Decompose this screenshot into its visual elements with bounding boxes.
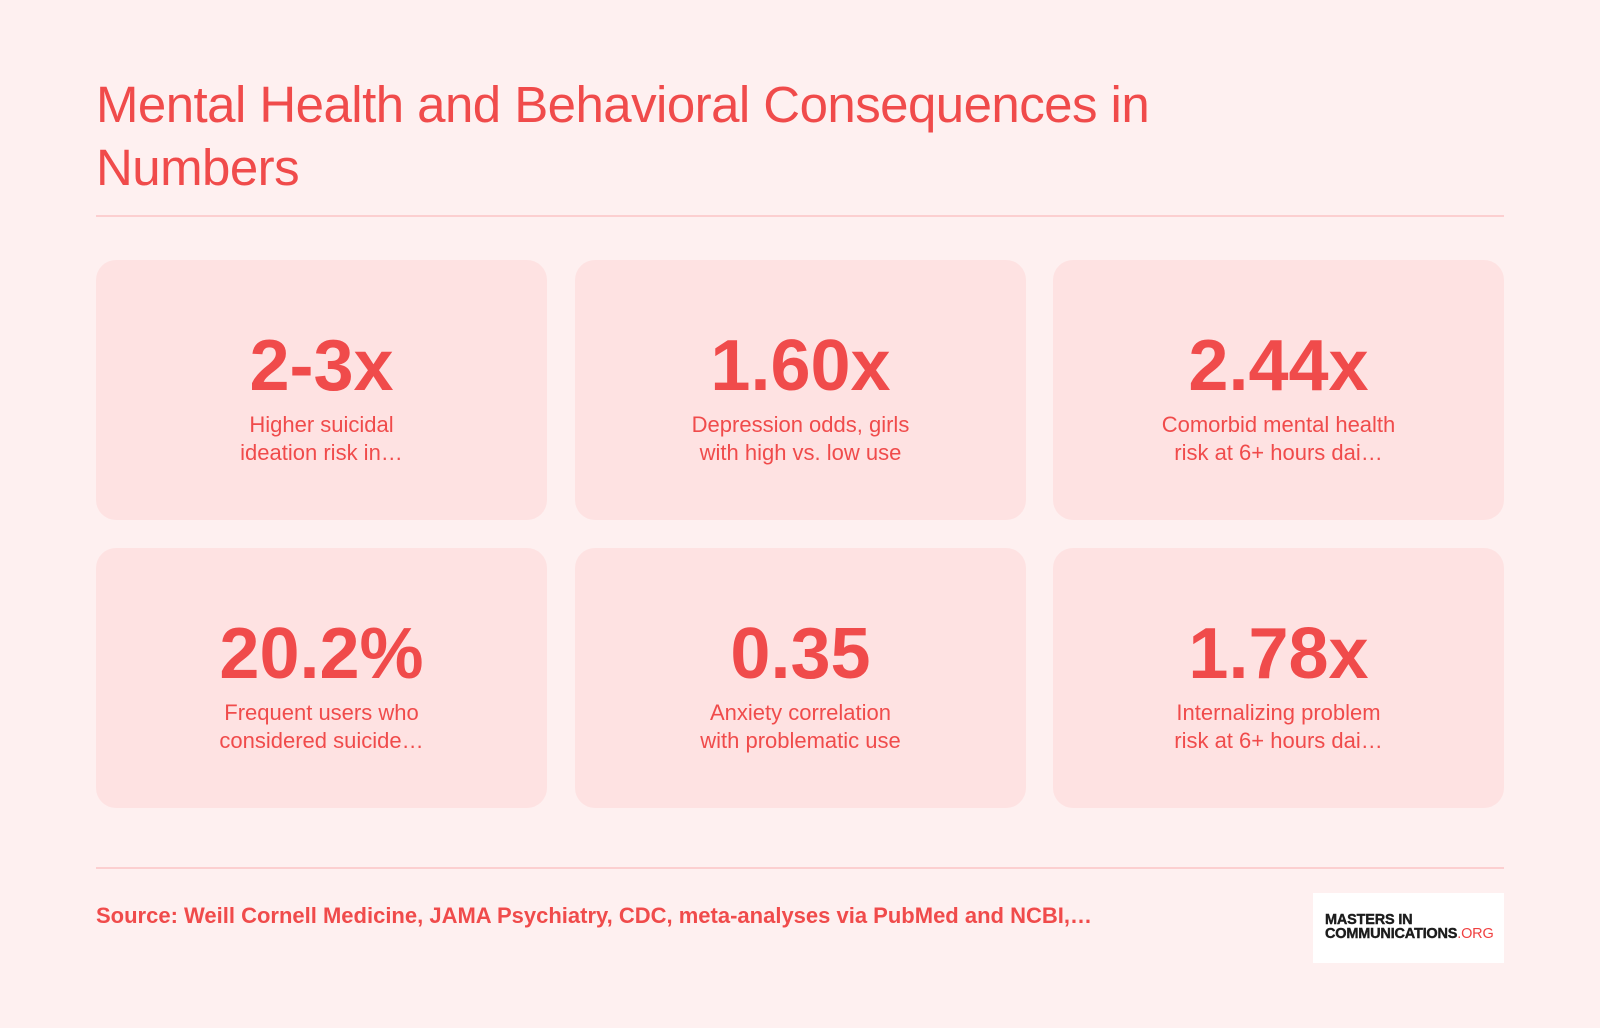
- logo: COMMUNICATIONS.ORG: [1325, 926, 1494, 942]
- panel: depression odds: [575, 260, 1026, 520]
- stat: 2.44x: 2.44x: [1188, 326, 1369, 406]
- label: internalizing risk: risk at 6+ hours dai…: [1174, 728, 1383, 753]
- label: comorbid risk: risk at 6+ hours dai…: [1174, 440, 1383, 465]
- logo: MASTERS IN: [1325, 912, 1412, 928]
- label: suicidal ideation: [240, 412, 403, 465]
- label: suicidal ideation: ideation risk in…: [240, 440, 403, 465]
- label: suicidal ideation: Higher suicidal: [249, 412, 394, 437]
- panel: internalizing problem risk: [1053, 548, 1504, 808]
- label: depression odds: with high vs. low use: [700, 440, 901, 465]
- panel: suicidal ideation risk: [96, 260, 547, 520]
- stat: 1.60x: 1.60x: [710, 326, 891, 406]
- label: anxiety correlation: with problematic use: [700, 728, 901, 753]
- label: frequent users: considered suicide…: [219, 728, 424, 753]
- label: comorbid risk: Comorbid mental health: [1162, 412, 1395, 437]
- stat: 20.2%: 20.2%: [219, 614, 424, 694]
- logo: [1313, 893, 1504, 963]
- label: internalizing risk: Internalizing problem: [1176, 700, 1381, 725]
- label: frequent users: [219, 700, 424, 753]
- label: depression odds: Depression odds, girls: [692, 412, 909, 437]
- title: Mental Health and Behavioral Consequences in Numbers: [96, 76, 1149, 196]
- label: depression odds: [692, 412, 909, 465]
- label: internalizing risk: [1174, 700, 1383, 753]
- panel: comorbid risk: [1053, 260, 1504, 520]
- source text: Source: Weill Cornell Medicine, JAMA Psychiatry, CDC, meta-analyses via PubMed and NCBI,…: [96, 903, 1092, 928]
- panel: anxiety correlation: [575, 548, 1026, 808]
- stat: 2-3x: 2-3x: [249, 326, 394, 406]
- label: comorbid risk: [1162, 412, 1395, 465]
- label: anxiety correlation: [700, 700, 901, 753]
- label: frequent users: Frequent users who: [224, 700, 419, 725]
- stat: 0.35: 0.35: [730, 614, 871, 694]
- label: anxiety correlation: Anxiety correlation: [710, 700, 891, 725]
- panel: frequent users: [96, 548, 547, 808]
- stat: 1.78x: 1.78x: [1188, 614, 1369, 694]
